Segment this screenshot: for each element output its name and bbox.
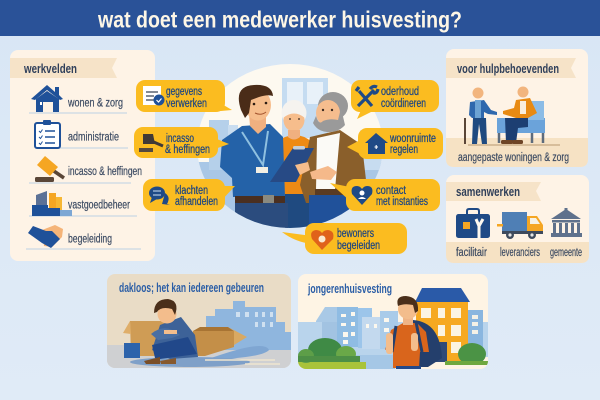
- illustration: geel appartementengebouw: [415, 288, 483, 362]
- panel: werkvelden: [10, 50, 155, 261]
- panel: jongerenhuisvesting: jongerenhuisvesting: [307, 282, 392, 296]
- item: incasso & heffingen: [29, 156, 142, 183]
- icon: spraakwolken: [149, 186, 170, 205]
- bewoonster: [282, 100, 310, 228]
- central illustration: medewerker met bewoners: [198, 64, 382, 228]
- illustration: stad: [206, 301, 291, 350]
- medewerker: [220, 85, 288, 230]
- callout: klachten afhandelen: afhandelen: [175, 196, 218, 208]
- callout: bewoners begeleiden: bewoners: [337, 228, 374, 240]
- callout: woonruimte regelen: woonruimte: [389, 133, 436, 145]
- callout: gegevens verwerken: gegevens: [166, 86, 202, 98]
- icon: vrachtwagen: [497, 212, 543, 259]
- item: vastgoedbeheer: [29, 191, 137, 216]
- callout: contact met instanties: [330, 179, 440, 211]
- callout: woonruimte regelen: [347, 128, 443, 159]
- item: begeleiding: begeleiding: [68, 234, 112, 246]
- callout: oderhoud coördineren: coördineren: [381, 98, 426, 110]
- panel: jongerenhuisvesting: [298, 274, 488, 372]
- callout: bewoners begeleiden: [282, 223, 407, 254]
- illustration: stadsgebouwen: [316, 307, 398, 352]
- callout: contact met instanties: contact: [376, 185, 407, 197]
- item: wonen & zorg: wonen & zorg: [67, 98, 123, 110]
- panel: dakloos: dakloos; het kan iedereen gebeuren: [119, 281, 264, 295]
- callout: woonruimte regelen: regelen: [390, 144, 418, 156]
- callout: contact met instanties: met instanties: [376, 196, 428, 208]
- icon: huis: [365, 133, 388, 154]
- klembord: [270, 146, 314, 182]
- heading: voor hulpbehoevenden: [446, 58, 576, 78]
- panel: dakloos: [107, 274, 291, 368]
- icon: hamer: [139, 134, 163, 152]
- icon: gemeentehuis: [550, 208, 582, 259]
- callout: gegevens verwerken: verwerken: [166, 98, 207, 110]
- icon: gereedschapskoffer: facilitair: [456, 247, 487, 259]
- dozen: [123, 321, 247, 358]
- item: wonen & zorg: [29, 85, 127, 113]
- icon: hart met persoon: [352, 186, 372, 205]
- callout: incasso & heffingen: [134, 127, 229, 158]
- title banner: [0, 0, 600, 36]
- icon: gemeentehuis: gemeente: [550, 247, 582, 259]
- heading: samenwerken: samenwerken: [456, 185, 520, 199]
- callout: klachten afhandelen: [143, 179, 235, 211]
- heading: voor hulpbehoevenden: voor hulpbehoevenden: [457, 62, 559, 76]
- illustration: jongere met rugzak: [385, 296, 442, 372]
- item: administratie: [35, 120, 128, 148]
- panel: voor hulpbehoevenden: [446, 49, 588, 167]
- illustration: verzorger en oudere in stoel: [465, 86, 560, 145]
- item: begeleiding: [26, 225, 141, 249]
- callout: incasso & heffingen: incasso: [166, 133, 194, 145]
- persoon op de grond: [144, 299, 198, 364]
- callout: oderhoud coördineren: [351, 80, 439, 119]
- heading: werkvelden: [10, 58, 117, 78]
- bewoner: [300, 92, 366, 230]
- illustration: bomen en water: [298, 338, 488, 369]
- item: incasso & heffingen: incasso & heffingen: [68, 166, 142, 178]
- callout: gegevens verwerken: [136, 80, 232, 112]
- icon: gereedschap: [356, 86, 378, 106]
- icon: document: [143, 86, 164, 106]
- panel: samenwerken: [446, 175, 589, 263]
- callout: klachten afhandelen: klachten: [175, 185, 208, 197]
- item: administratie: administratie: [68, 132, 119, 144]
- icon: vrachtwagen: leveranciers: [500, 247, 540, 259]
- item: vastgoedbeheer: vastgoedbeheer: [68, 200, 130, 212]
- callout: oderhoud coördineren: oderhoud: [381, 86, 419, 98]
- callout: bewoners begeleiden: begeleiden: [337, 240, 380, 252]
- heading: werkvelden: werkvelden: [23, 62, 77, 76]
- icon: hart: [311, 230, 333, 250]
- heading: samenwerken: [446, 182, 541, 201]
- title banner: wat doet een medewerker huisvesting?: [97, 6, 462, 32]
- icon: gereedschapskoffer: [456, 209, 490, 259]
- callout: incasso & heffingen: & heffingen: [165, 144, 210, 156]
